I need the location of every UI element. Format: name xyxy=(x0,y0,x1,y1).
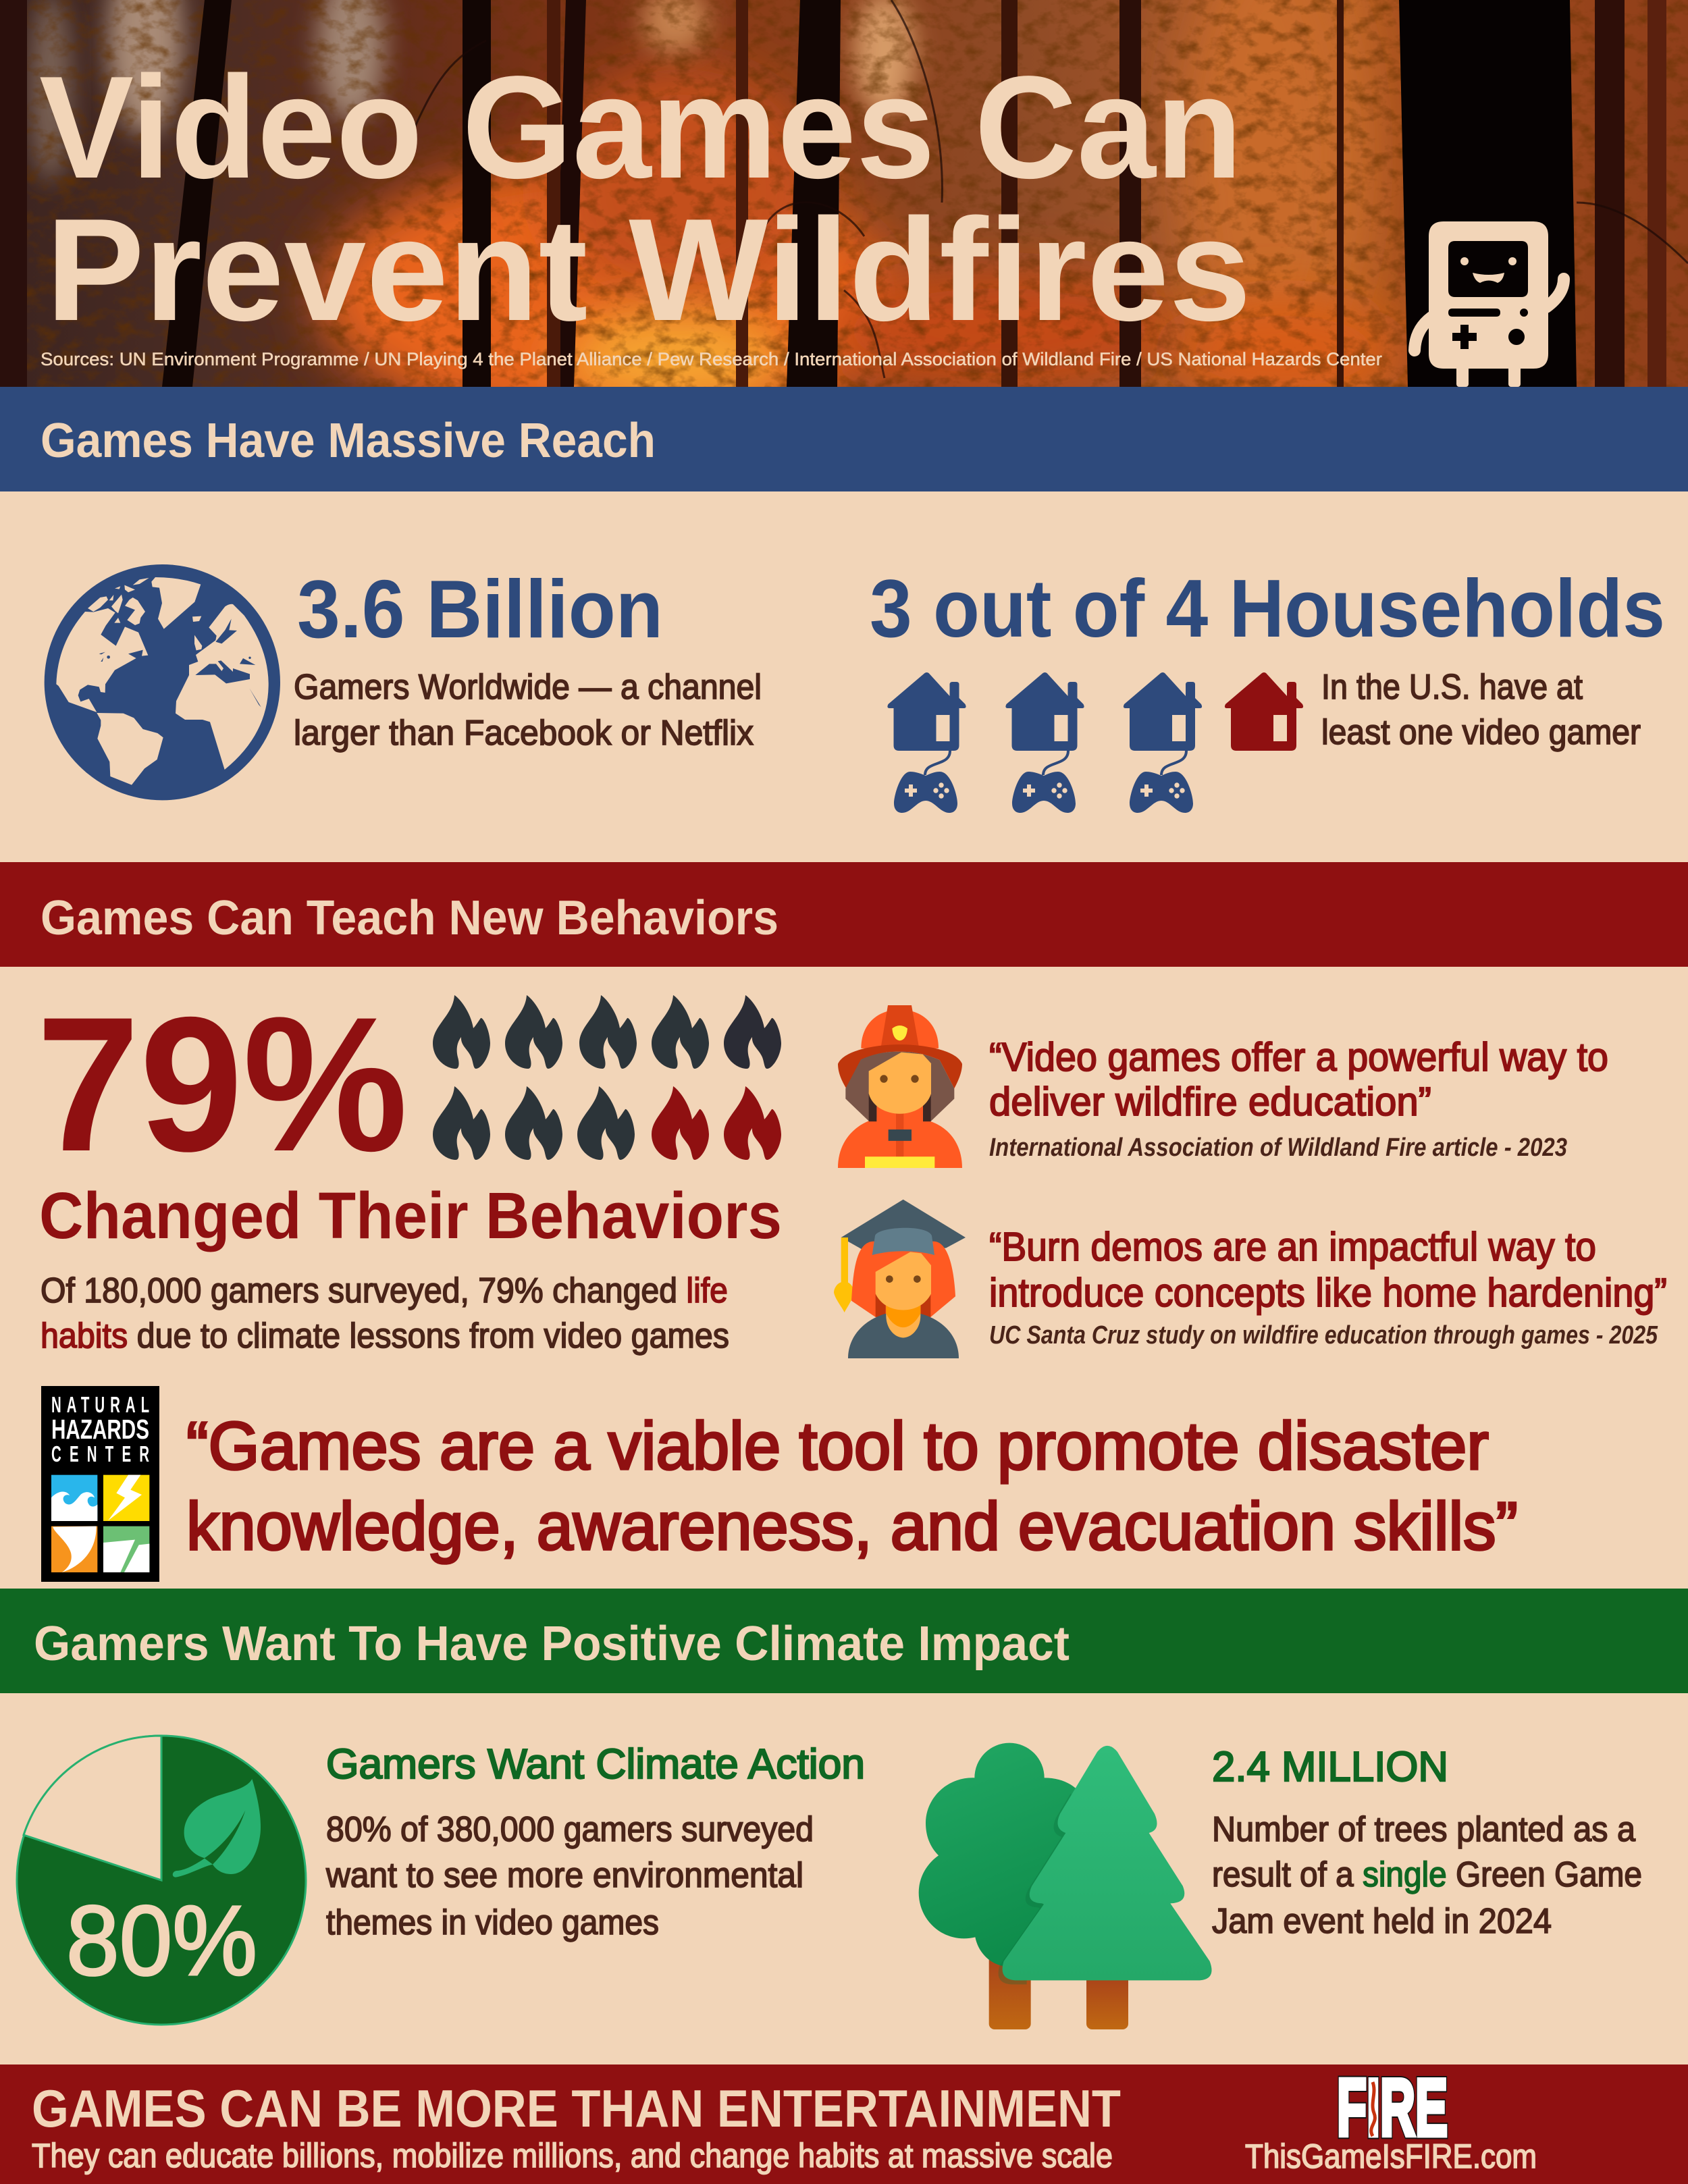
text: trees planted xyxy=(1212,1810,1642,1941)
panel: header with forest fire photo xyxy=(0,0,1688,387)
text: trees planted: Jam event held in 2024 xyxy=(1212,1902,1552,1941)
title: Prevent Wildfires xyxy=(46,188,1251,351)
quote: wildfire education: International Association of Wildland Fire article - 2023 xyxy=(989,1134,1567,1162)
icon: three blue houses with game controllers xyxy=(887,672,1202,813)
logo: FIRE: FIRE xyxy=(1337,2062,1448,2153)
logo: Natural Hazards Center xyxy=(41,1386,159,1582)
quote: burn demos: introduce concepts like home hardening” xyxy=(989,1271,1667,1315)
icon: globe xyxy=(45,564,280,800)
chart value: 80% xyxy=(66,1886,257,1996)
text: trees planted: Number of trees planted as a xyxy=(1212,1810,1635,1849)
stat: 79%: 79% xyxy=(36,978,408,1192)
sources line: Sources: UN Environment Programme / UN Playing 4 the Planet Alliance / Pew Research / International Association of Wildland Fire / US National Hazards Center xyxy=(41,349,1382,369)
icon: ten flames pictogram xyxy=(433,995,781,1160)
text: environmental themes: want to see more environmental xyxy=(325,1856,803,1895)
website: ThisGameIsFIRE.com xyxy=(1245,2137,1537,2175)
forest fire background xyxy=(0,0,1688,387)
text: survey detail xyxy=(41,1271,729,1356)
quote: games are a viable tool: “Games are a viable tool to promote disaster xyxy=(186,1408,1489,1484)
text: trees planted: result of a single Green Game xyxy=(1212,1855,1642,1894)
icon: red house xyxy=(1225,672,1303,751)
heading: gamers want climate action: Gamers Want Climate Action xyxy=(326,1741,865,1788)
logo: Natural Hazards Center: NATURAL xyxy=(51,1392,149,1417)
text: survey detail: habits due to climate lessons from video games xyxy=(41,1316,729,1356)
title: Video Games Can xyxy=(39,45,1242,209)
section band: Gamers Want To Have Positive Climate Impact: Gamers Want To Have Positive Climate Impact xyxy=(34,1617,1070,1671)
stat: 3.6 Billion: 3.6 Billion xyxy=(297,563,663,655)
quote: burn demos: “Burn demos are an impactful way to xyxy=(989,1225,1596,1269)
logo: Natural Hazards Center: HAZARDS xyxy=(51,1414,149,1445)
section band: Games Can Teach New Behaviors: Games Can Teach New Behaviors xyxy=(41,891,779,945)
icon: firefighter xyxy=(838,1005,962,1168)
quote: games are a viable tool: knowledge, awareness, and evacuation skills” xyxy=(186,1489,1518,1564)
text: households in the U.S.: least one video gamer xyxy=(1321,713,1641,752)
text: gamers worldwide: Gamers Worldwide — a channel xyxy=(294,668,762,707)
icon: two trees xyxy=(919,1743,1212,2029)
title xyxy=(39,45,1251,351)
section band: Gamers Want To Have Positive Climate Impact xyxy=(0,1589,1688,1693)
text: gamers worldwide xyxy=(294,668,762,753)
text: households in the U.S. xyxy=(1321,668,1641,752)
quote: wildfire education xyxy=(989,1035,1608,1162)
stat: 2.4 million: 2.4 MILLION xyxy=(1212,1744,1448,1790)
heading: changed their behaviors: Changed Their Behaviors xyxy=(39,1179,782,1252)
text: survey detail: Of 180,000 gamers surveyed, 79% changed life xyxy=(41,1271,728,1310)
quote: burn demos xyxy=(989,1225,1667,1350)
section band: Games Have Massive Reach xyxy=(0,387,1688,491)
text: households in the U.S.: In the U.S. have at xyxy=(1321,668,1583,707)
icon: leaf xyxy=(173,1779,261,1877)
quote: wildfire education: “Video games offer a powerful way to xyxy=(989,1035,1608,1080)
logo: FIRE xyxy=(1337,2062,1448,2153)
logo: FIRE: FIRE xyxy=(1337,2062,1448,2153)
text: environmental themes: themes in video games xyxy=(326,1903,659,1942)
chart: 80% pie with leaf xyxy=(17,1736,306,2025)
footer headline: GAMES CAN BE MORE THAN ENTERTAINMENT xyxy=(32,2079,1121,2138)
panel: footer xyxy=(0,2062,1688,2184)
text: environmental themes xyxy=(325,1810,814,1942)
quote: games are a viable tool xyxy=(186,1408,1518,1564)
icon: student with graduation cap xyxy=(834,1200,966,1358)
section band: Games Can Teach New Behaviors xyxy=(0,862,1688,967)
text: environmental themes: 80% of 380,000 gamers surveyed xyxy=(326,1810,814,1849)
text: gamers worldwide: larger than Facebook or Netflix xyxy=(294,714,754,753)
footer subline: They can educate billions, mobilize millions, and change habits at massive scale xyxy=(32,2137,1113,2175)
icon: handheld game console mascot xyxy=(1415,221,1564,387)
logo: Natural Hazards Center: CENTER xyxy=(51,1441,149,1466)
quote: wildfire education: deliver wildfire education” xyxy=(989,1080,1431,1124)
section band: Games Have Massive Reach: Games Have Massive Reach xyxy=(41,414,656,468)
